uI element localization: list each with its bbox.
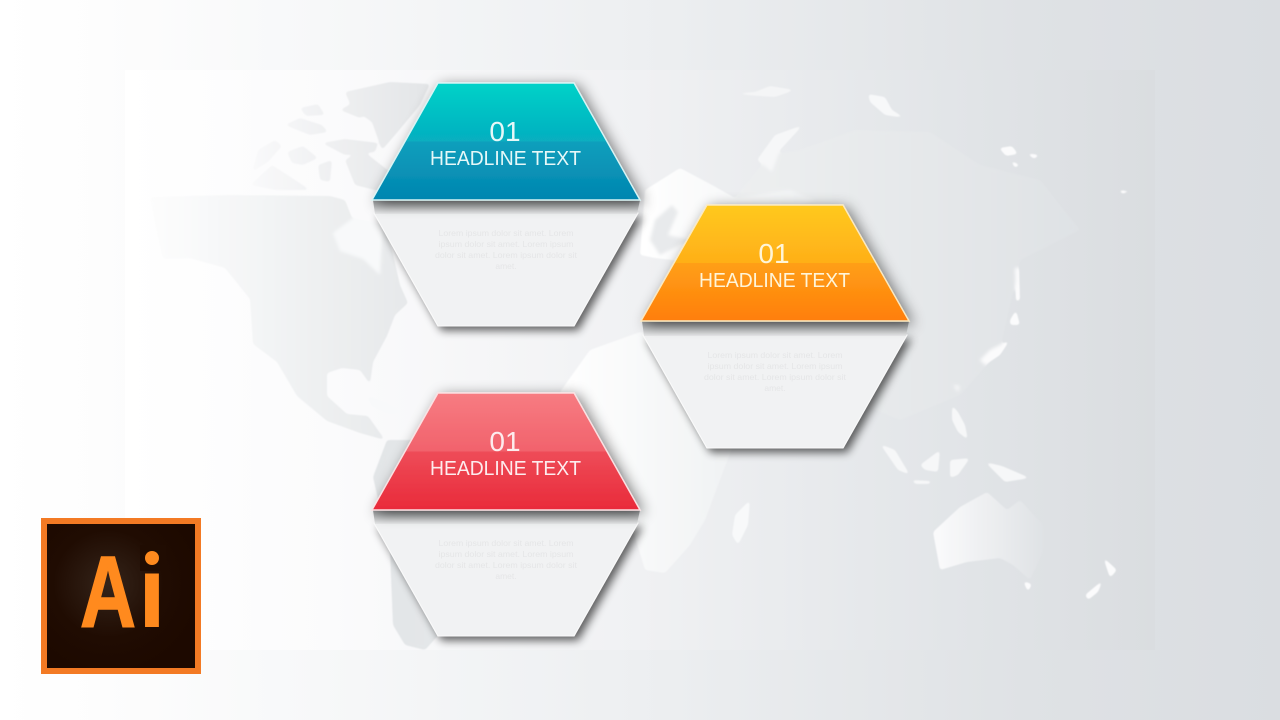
blue body text: ipsum dolor sit amet. Lorem ipsum xyxy=(438,239,574,249)
red body text: amet. xyxy=(495,571,517,581)
south america xyxy=(373,440,560,650)
orange headline: HEADLINE TEXT xyxy=(699,270,850,292)
hudson bay xyxy=(333,218,383,275)
icon: adobe illustrator logo: i xyxy=(138,537,166,649)
orange trapezoid header xyxy=(641,205,909,321)
wrangel island xyxy=(1118,190,1155,235)
new zealand and tasmania xyxy=(1023,557,1117,600)
north america xyxy=(150,195,408,440)
orange body text: dolor sit amet. Lorem ipsum dolor sit xyxy=(704,372,847,382)
orange number: 01 xyxy=(758,238,790,269)
greenland xyxy=(345,82,430,150)
madagascar xyxy=(732,500,750,545)
caribbean islands xyxy=(367,396,402,414)
eurasia xyxy=(735,130,1080,420)
red body text: ipsum dolor sit amet. Lorem ipsum xyxy=(438,549,574,559)
southeast asia islands xyxy=(880,385,1030,484)
blue number: 01 xyxy=(489,116,521,147)
japan and kamchatka xyxy=(980,268,1020,365)
franz josef land xyxy=(868,94,905,118)
red body text xyxy=(435,538,578,581)
red body text: dolor sit amet. Lorem ipsum dolor sit xyxy=(435,560,578,570)
red number: 01 xyxy=(489,426,521,457)
red headline: HEADLINE TEXT xyxy=(430,458,581,480)
australia xyxy=(933,492,1043,580)
hexagon card: blue xyxy=(372,83,640,326)
red trapezoid header xyxy=(372,393,640,510)
blue headline: HEADLINE TEXT xyxy=(430,148,581,170)
blue body text: amet. xyxy=(495,261,517,271)
orange shadow band xyxy=(642,321,909,336)
world map xyxy=(150,82,1155,650)
orange body text: ipsum dolor sit amet. Lorem ipsum xyxy=(708,361,842,371)
map panel xyxy=(125,70,1155,650)
blue body text xyxy=(435,228,578,271)
hexagon card: orange xyxy=(641,205,909,448)
new siberian islands xyxy=(999,146,1040,168)
red shadow band xyxy=(373,510,640,524)
orange body text xyxy=(704,350,847,393)
europe xyxy=(640,168,815,262)
orange body text: Lorem ipsum dolor sit amet. Lorem xyxy=(708,350,842,360)
blue trapezoid header xyxy=(372,83,640,200)
novaya zemlya xyxy=(757,125,803,172)
blue body text: dolor sit amet. Lorem ipsum dolor sit xyxy=(435,250,578,260)
orange lower panel xyxy=(643,335,907,448)
scandinavia sea xyxy=(650,205,690,255)
arctic islands xyxy=(250,100,395,195)
svalbard xyxy=(733,86,795,97)
blue body text: Lorem ipsum dolor sit amet. Lorem xyxy=(438,228,574,238)
icon: adobe illustrator logo xyxy=(44,521,198,671)
orange body text: amet. xyxy=(764,383,786,393)
hexagon card: red xyxy=(372,393,640,636)
blue shadow band xyxy=(373,200,640,214)
icon: adobe illustrator logo: A xyxy=(80,537,136,649)
red body text: Lorem ipsum dolor sit amet. Lorem xyxy=(438,538,574,548)
africa xyxy=(560,332,735,573)
blue lower panel xyxy=(374,213,638,326)
red lower panel xyxy=(374,523,638,636)
